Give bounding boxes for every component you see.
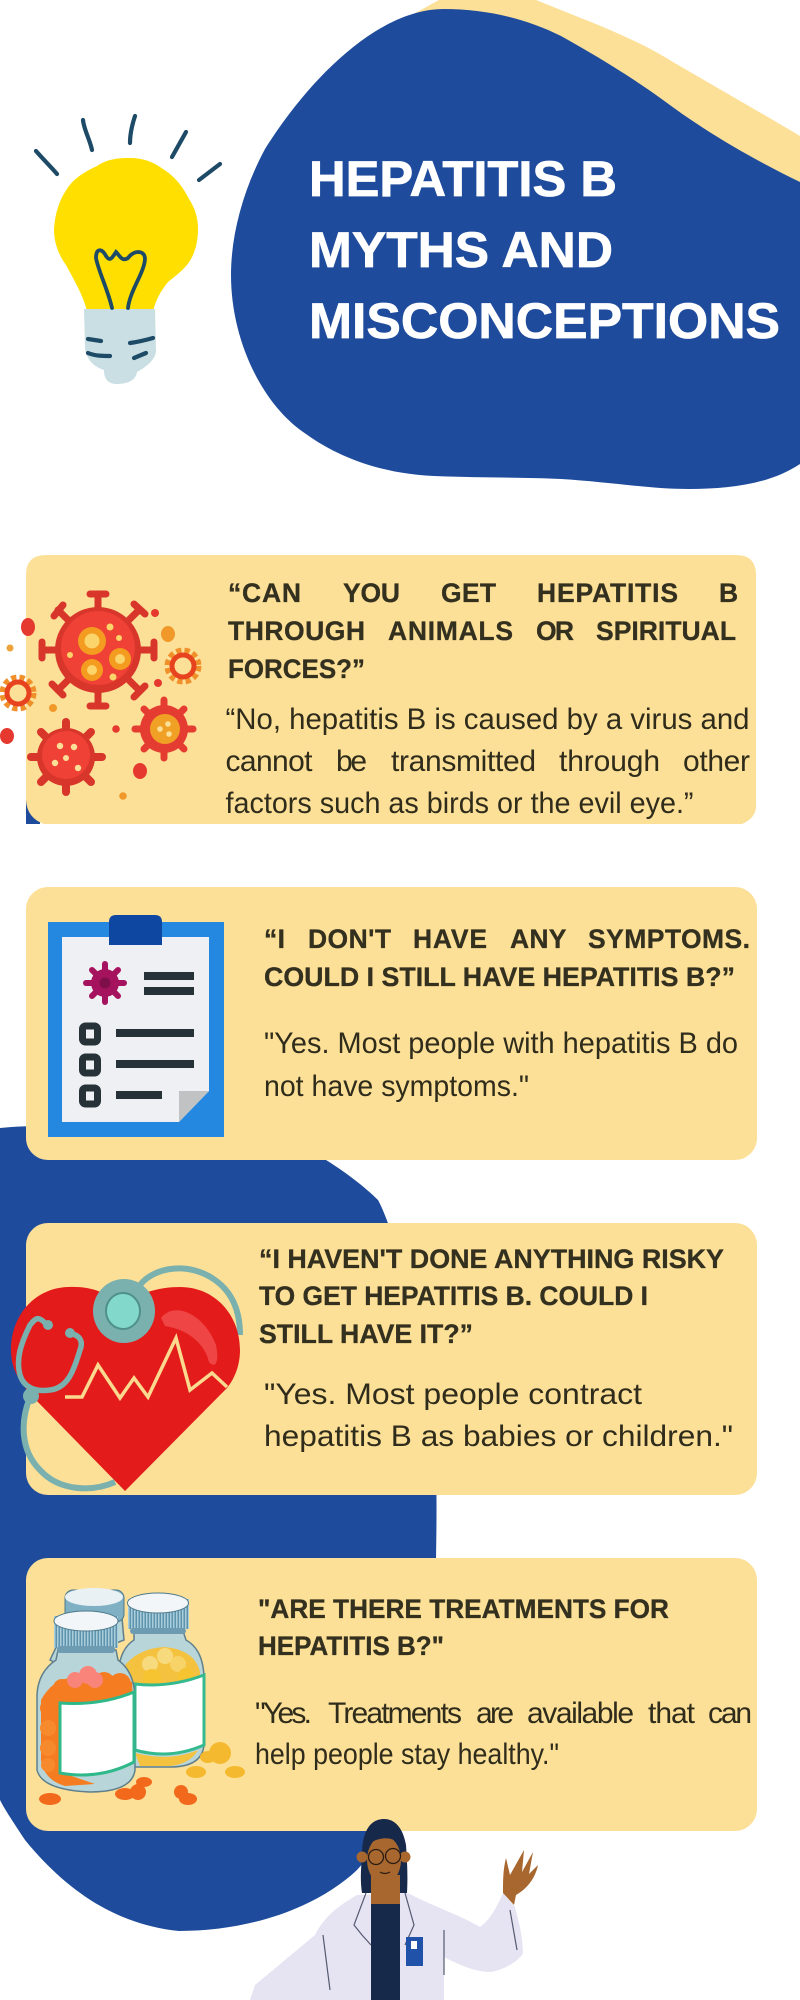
heading: card 1 question line 2: OR: [536, 616, 574, 646]
heading: card 2 question: ANY: [510, 924, 567, 954]
heading: card 2 question: [264, 924, 750, 992]
heading: card 1 question: B: [719, 578, 738, 608]
text: card 3 answer: [264, 1378, 733, 1453]
header blue blob: [231, 9, 800, 489]
text: card 1 answer: transmitted: [391, 745, 536, 778]
text: card 4 answer: [255, 1697, 752, 1771]
lower blue blob background: [0, 1126, 437, 1931]
page title: [309, 151, 780, 349]
heading: card 3 question: “I HAVEN'T DONE ANYTHING RISKY: [259, 1244, 724, 1274]
text: card 4 answer: are: [476, 1697, 514, 1730]
back bottle: [50, 1588, 124, 1665]
heading: card 1 question: GET: [441, 578, 496, 608]
page title: HEPATITIS B: [309, 151, 617, 207]
loose pills: [186, 1742, 245, 1778]
heading: card 1 question: YOU: [343, 578, 400, 608]
text: card 1 answer: be: [336, 745, 367, 778]
icon: light bulb: [36, 116, 220, 384]
heading: card 4 question: HEPATITIS B?": [258, 1631, 444, 1661]
panel: card 1: [0, 555, 756, 824]
text: card 3 answer: hepatitis B as babies or children.": [264, 1420, 733, 1453]
header cream blob: [410, 0, 800, 300]
front bottle: [37, 1611, 135, 1792]
heading: card 3 question: [259, 1244, 724, 1349]
text: card 2 answer: "Yes. Most people with hepatitis B do: [264, 1027, 738, 1060]
text: card 1 answer: through: [559, 745, 660, 778]
heading: card 4 question: "ARE THERE TREATMENTS FOR: [258, 1594, 669, 1624]
panel: card 2: [26, 887, 757, 1160]
text: card 3 answer: "Yes. Most people contract: [264, 1378, 643, 1411]
small gears: [3, 651, 198, 708]
heading: card 2 question: “I: [264, 924, 285, 954]
text: card 4 answer: Treatments: [328, 1697, 462, 1730]
text: card 4 answer: "Yes.: [255, 1697, 312, 1730]
right bottle: [118, 1593, 204, 1767]
text: card 1 answer: [226, 703, 750, 820]
panel: card 4: [26, 1558, 757, 1831]
heading: card 4 question: [258, 1594, 669, 1661]
icon: pill bottles: [37, 1588, 245, 1805]
text: card 4 answer: can: [708, 1697, 752, 1730]
heading: card 1 question: “CAN: [228, 578, 301, 608]
text: card 1 answer: factors such as birds or the evil eye.”: [226, 787, 694, 820]
text: card 4 answer: available: [527, 1697, 634, 1730]
icon: heart with stethoscope: [11, 1268, 240, 1491]
heading: card 2 question: HAVE: [413, 924, 487, 954]
heading: card 1 question line 2: SPIRITUAL: [596, 616, 736, 646]
heading: card 2 question: COULD I STILL HAVE HEPATITIS B?”: [264, 962, 735, 992]
page title: MYTHS AND: [309, 222, 613, 278]
icon: clipboard: [48, 915, 224, 1137]
text: card 1 answer: cannot: [226, 745, 313, 778]
heading: card 3 question: TO GET HEPATITIS B. COULD I: [259, 1281, 648, 1311]
heading: card 1 question: HEPATITIS: [537, 578, 678, 608]
text: card 4 answer: help people stay healthy.": [255, 1738, 559, 1771]
illustration: doctor: [250, 1819, 538, 2000]
text: card 1 answer: other: [683, 745, 750, 778]
panel: card 3: [11, 1223, 757, 1495]
heading: card 2 question: DON'T: [308, 924, 391, 954]
heading: card 2 question: SYMPTOMS.: [588, 924, 750, 954]
text: card 1 answer: “No, hepatitis B is caused by a virus and: [226, 703, 750, 736]
text: card 2 answer: not have symptoms.": [264, 1070, 529, 1103]
heading: card 1 question line 3: FORCES?”: [228, 654, 365, 684]
text: card 2 answer: [264, 1027, 738, 1103]
heading: card 3 question: STILL HAVE IT?”: [259, 1319, 473, 1349]
icon: viruses: [0, 594, 198, 800]
heading: card 1 question line 2: ANIMALS: [388, 616, 513, 646]
page title: MISCONCEPTIONS: [309, 293, 780, 349]
text: card 4 answer: that: [648, 1697, 696, 1730]
heading: card 1 question line 2: THROUGH: [228, 616, 365, 646]
